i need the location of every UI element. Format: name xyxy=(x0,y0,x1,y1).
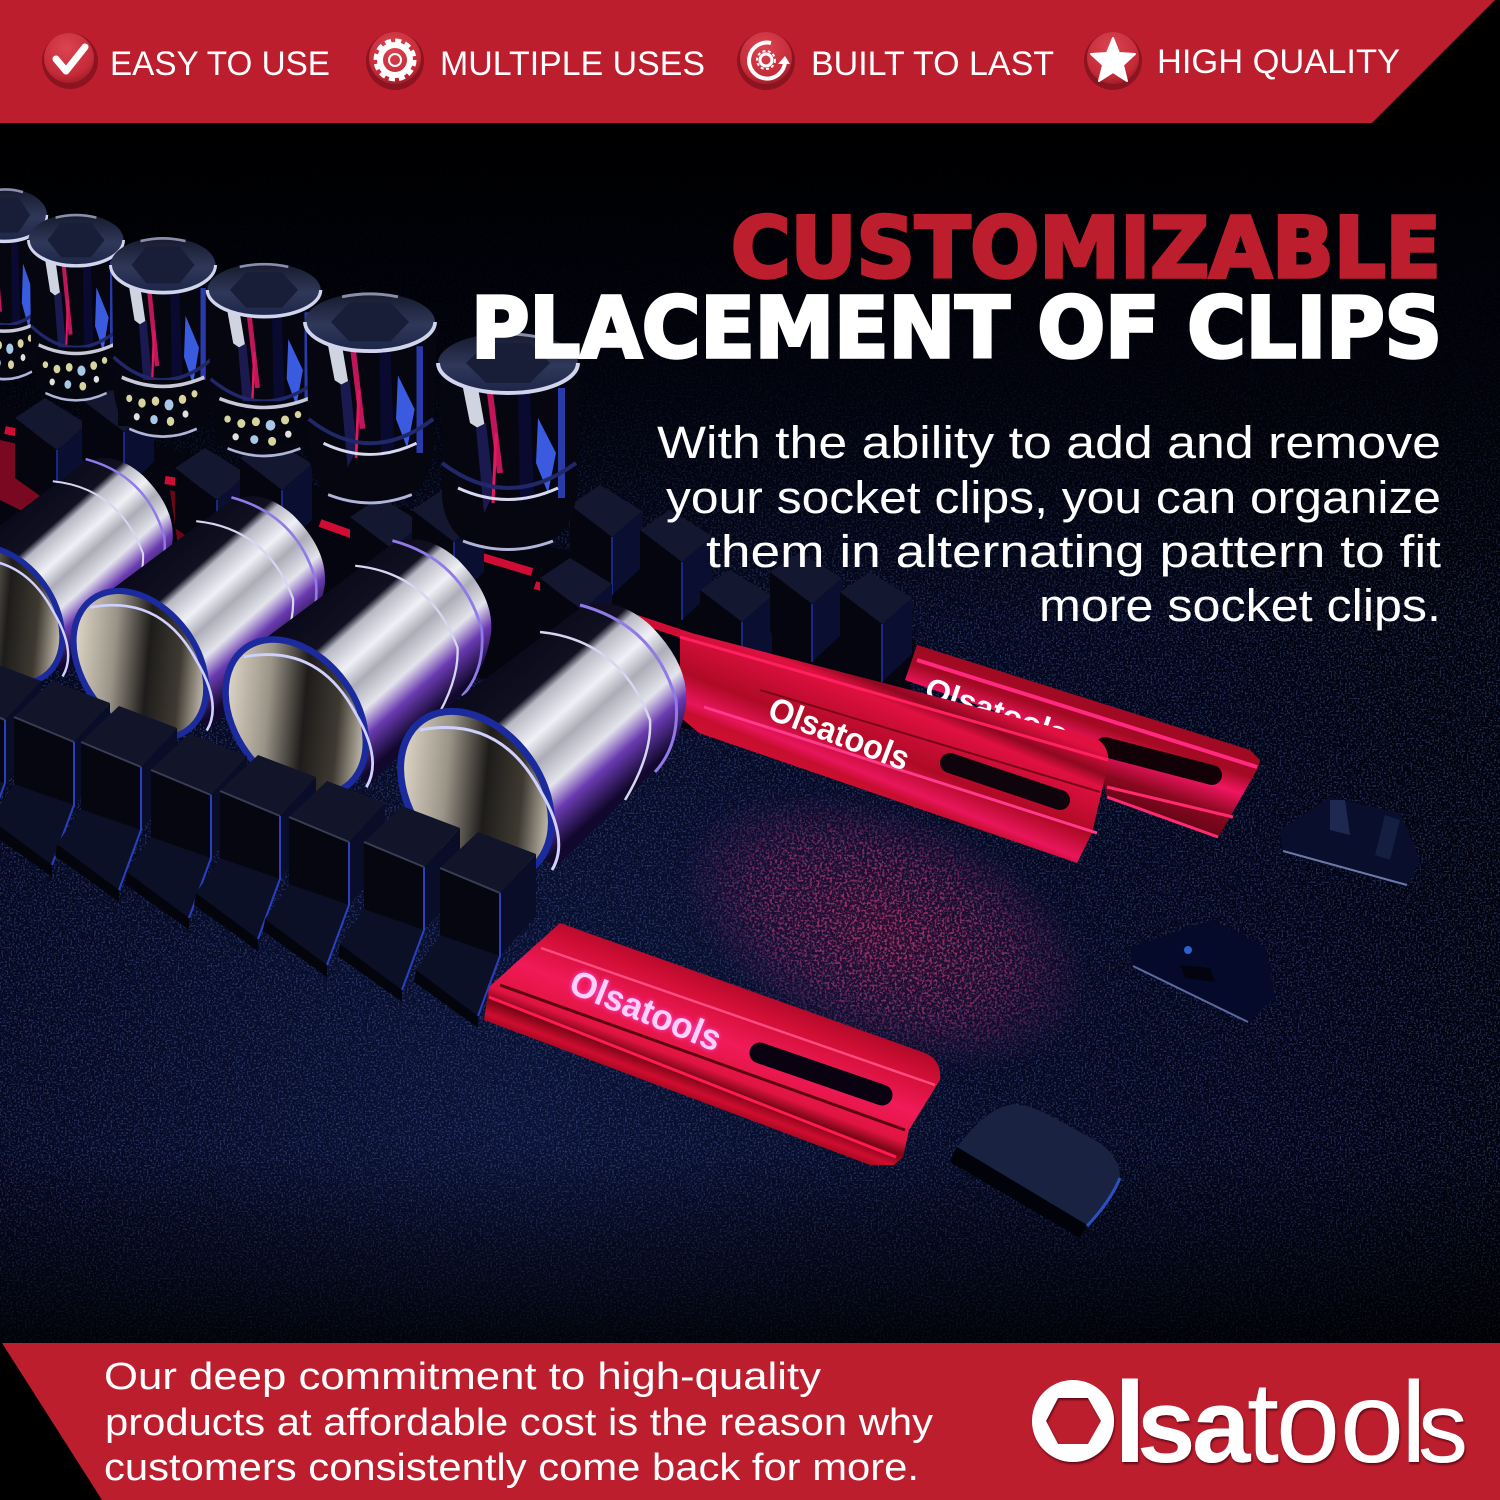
icon: star xyxy=(1084,32,1142,90)
brand logo: o xyxy=(1276,1359,1340,1487)
heading: PLACEMENT OF CLIPS xyxy=(471,279,1442,377)
front clips row xyxy=(0,659,536,1028)
brand logo: s xyxy=(1418,1372,1468,1484)
brand logo: l xyxy=(1401,1359,1427,1487)
photo background: dark fabric xyxy=(0,217,1500,1343)
commitment text: products at affordable cost is the reason why xyxy=(105,1402,933,1444)
rail slot xyxy=(1105,747,1212,775)
rail logo: Olsatools xyxy=(921,671,1072,752)
socket rail assembly: back row xyxy=(0,189,915,730)
brand logo: t xyxy=(1247,1359,1279,1487)
back sockets xyxy=(0,189,580,550)
heading: CUSTOMIZABLE xyxy=(731,199,1441,297)
icon: cycle gear xyxy=(737,32,795,90)
rail logo glow: Olsatools xyxy=(564,961,728,1059)
benefit: built to last: BUILT TO LAST xyxy=(811,45,1054,83)
heading xyxy=(471,199,1442,377)
rail end cap xyxy=(950,1105,1120,1238)
loose clip 2 xyxy=(1130,920,1275,1023)
brand logo: a xyxy=(1192,1368,1252,1485)
benefit: easy to use xyxy=(42,33,330,89)
rail logo: Olsatools xyxy=(564,961,728,1059)
brand logo: o xyxy=(1340,1359,1404,1487)
back rail base xyxy=(0,405,915,730)
commitment text xyxy=(104,1356,933,1489)
description text: your socket clips, you can organize xyxy=(666,472,1441,523)
benefit: easy to use: EASY TO USE xyxy=(110,45,330,83)
benefit: multiple uses: MULTIPLE USES xyxy=(440,45,705,83)
loose clip 1 xyxy=(1280,797,1420,887)
description text: With the ability to add and remove xyxy=(657,417,1441,468)
benefit: built to last xyxy=(737,32,1054,90)
benefit: multiple uses xyxy=(366,32,705,90)
brand logo: l xyxy=(1114,1359,1146,1487)
icon: gear xyxy=(366,32,424,90)
rail: front xyxy=(484,923,940,1165)
description text: them in alternating pattern to fit xyxy=(706,526,1442,577)
rail slot xyxy=(950,763,1060,800)
benefit: high quality xyxy=(1084,32,1400,90)
front sockets xyxy=(0,458,686,908)
rail: middle xyxy=(680,630,1108,863)
bottom banner xyxy=(0,1343,1500,1500)
brand logo xyxy=(1032,1359,1468,1487)
back rail clips xyxy=(15,380,912,682)
commitment text: customers consistently come back for more. xyxy=(104,1447,919,1489)
top banner xyxy=(0,0,1500,123)
rail: back right xyxy=(905,645,1260,838)
rail logo: Olsatools xyxy=(763,690,915,779)
description text: more socket clips. xyxy=(1039,580,1441,631)
icon: check xyxy=(42,33,98,89)
brand logo: s xyxy=(1137,1368,1195,1485)
commitment text: Our deep commitment to high-quality xyxy=(104,1356,821,1398)
rail slot xyxy=(760,1053,882,1095)
description text xyxy=(657,417,1442,631)
benefit: high quality: HIGH QUALITY xyxy=(1157,43,1400,81)
back rail red stripes xyxy=(5,430,700,640)
